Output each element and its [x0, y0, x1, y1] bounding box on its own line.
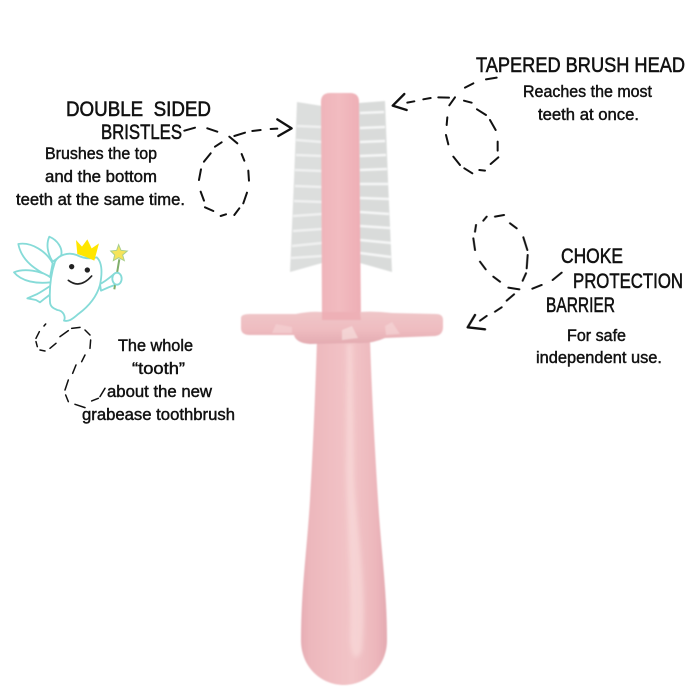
handle: [301, 340, 387, 685]
arrow: dashed loop to bristles: [184, 119, 292, 216]
text: tapered description: teeth at once.: [538, 106, 639, 124]
text: double sided description: and the bottom: [45, 168, 157, 186]
icon: tooth fairy: [14, 237, 127, 321]
arrow: dashed line from fairy to text: [36, 324, 105, 408]
heading: choke protection barrier: BARRIER: [546, 294, 615, 317]
text: barrier description: For safe: [567, 327, 626, 345]
fairy right arm and wand: [100, 245, 127, 291]
text: the whole tooth: grabease toothbrush: [82, 406, 235, 424]
text: the whole tooth: The whole: [118, 337, 193, 355]
arrow: dashed loop to barrier: [468, 215, 562, 329]
text: double sided description: [16, 145, 185, 209]
bristles: right side: [359, 101, 392, 272]
toothbrush: [241, 93, 443, 685]
text: barrier description: [536, 327, 662, 367]
fairy face: [68, 264, 92, 284]
arrow: dashed loop to brush head: [393, 78, 498, 173]
text: the whole tooth: about the new: [107, 383, 212, 401]
fairy wings: [14, 237, 62, 283]
choke protection barrier: [241, 312, 443, 344]
text: tapered description: Reaches the most: [523, 83, 652, 101]
text: the whole tooth: “tooth”: [132, 360, 185, 378]
heading: double sided bristles: DOUBLE SIDED: [66, 98, 211, 121]
heading: double sided bristles: BRISTLES: [101, 121, 182, 144]
fairy crown: [76, 239, 99, 261]
heading: choke protection barrier: CHOKE: [561, 245, 623, 268]
brush neck and head: [321, 93, 361, 325]
bristles: left side: [290, 102, 322, 272]
text: tapered description: [523, 83, 652, 124]
text: double sided description: Brushes the top: [45, 145, 157, 163]
fairy tooth body: [50, 254, 101, 321]
fairy left arm and pointing hand: [27, 285, 53, 302]
heading: choke protection barrier: [546, 245, 683, 317]
text: double sided description: teeth at the same time.: [16, 191, 185, 209]
text: barrier description: independent use.: [536, 349, 662, 367]
text: the whole tooth: [82, 337, 235, 424]
heading: double sided bristles: [66, 98, 211, 144]
